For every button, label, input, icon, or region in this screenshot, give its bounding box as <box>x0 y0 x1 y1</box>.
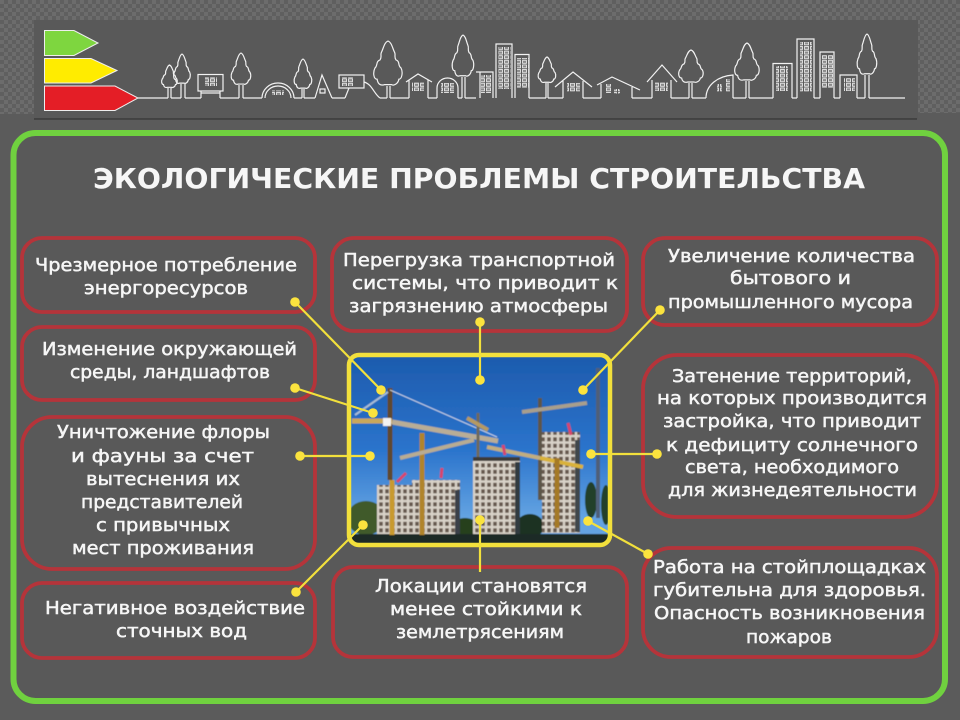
icon: red arrow <box>44 86 138 110</box>
building centre <box>473 457 520 535</box>
panel: site hazards: Работа на стойплощадках <box>653 557 926 578</box>
cranes <box>352 368 598 535</box>
connector: earthquakes <box>475 515 485 572</box>
panel: flora and fauna: и фауны за счет <box>71 446 254 467</box>
panel: energy overuse: энергоресурсов <box>84 278 248 299</box>
panel: earthquakes: Локации становятся <box>375 576 587 597</box>
main panel <box>14 133 945 701</box>
connector: shading <box>586 449 662 459</box>
panel: site hazards: Опасность возникновения <box>654 603 925 624</box>
panel: transport overload: системы, что приводит к <box>352 273 618 294</box>
header panel <box>34 20 918 119</box>
panel: transport overload: Перегрузка транспортной <box>343 250 615 271</box>
panel: landscape change: Изменение окружающей <box>42 339 297 360</box>
panel: earthquakes: менее стойкими к <box>390 599 582 620</box>
panel: flora and fauna: вытеснения их <box>86 469 240 490</box>
panel: waste growth: Увеличение количества <box>668 246 915 267</box>
connector: flora and fauna <box>295 451 375 461</box>
connector: site hazards <box>583 516 653 559</box>
connector: landscape change <box>290 383 378 418</box>
panel: waste water <box>22 583 315 658</box>
photo: construction site <box>347 355 611 546</box>
panel: transport overload <box>332 238 627 331</box>
panel: shading <box>643 355 937 517</box>
ground <box>351 533 608 543</box>
panel: energy overuse: Чрезмерное потребление <box>35 255 297 276</box>
building right <box>542 432 580 533</box>
panel: flora and fauna <box>22 417 315 569</box>
photo frame <box>349 355 610 545</box>
connector: waste growth <box>578 305 665 395</box>
panel: transport overload: загрязнению атмосферы <box>349 296 608 317</box>
panel: waste water: Негативное воздействие <box>45 598 305 619</box>
panel: earthquakes <box>333 567 627 657</box>
panel: waste growth: бытового и <box>730 268 851 289</box>
dotted top band <box>0 0 960 114</box>
panel: shading: Затенение территорий, <box>672 366 912 387</box>
panel: shading: застройка, что приводит <box>663 411 921 432</box>
panel: site hazards <box>643 548 937 657</box>
panel: energy overuse <box>22 238 315 312</box>
connector: transport overload <box>475 317 485 385</box>
icon: green arrow <box>44 30 98 56</box>
connector: waste water <box>291 520 368 597</box>
panel: flora and fauna: представителей <box>81 492 243 513</box>
panel: earthquakes: землетрясениям <box>396 622 564 643</box>
title: ЭКОЛОГИЧЕСКИЕ ПРОБЛЕМЫ СТРОИТЕЛЬСТВА <box>93 163 866 195</box>
panel: flora and fauna: Уничтожение флоры <box>57 422 270 443</box>
panel: shading: на которых производится <box>657 388 927 409</box>
panel: flora and fauna: мест проживания <box>72 538 254 559</box>
panel: shading: к дефициту солнечного <box>666 435 918 456</box>
panel: shading: для жизнедеятельности <box>668 480 917 501</box>
panel: site hazards: пожаров <box>746 627 832 648</box>
skyline illustration <box>138 34 905 98</box>
panel: waste water: сточных вод <box>116 621 247 642</box>
panel: shading: света, необходимого <box>685 457 899 478</box>
panel: landscape change <box>22 327 315 400</box>
connector: energy overuse <box>290 297 386 395</box>
connectors <box>290 297 665 597</box>
far trees <box>351 482 608 535</box>
building left <box>377 480 460 535</box>
panel: site hazards: губительна для здоровья. <box>653 580 926 601</box>
icon: yellow arrow <box>44 58 117 83</box>
panel: flora and fauna: с привычных <box>96 515 230 536</box>
panel: waste growth <box>643 238 937 325</box>
panel: waste growth: промышленного мусора <box>668 292 913 313</box>
panel: landscape change: среды, ландшафтов <box>70 362 270 383</box>
